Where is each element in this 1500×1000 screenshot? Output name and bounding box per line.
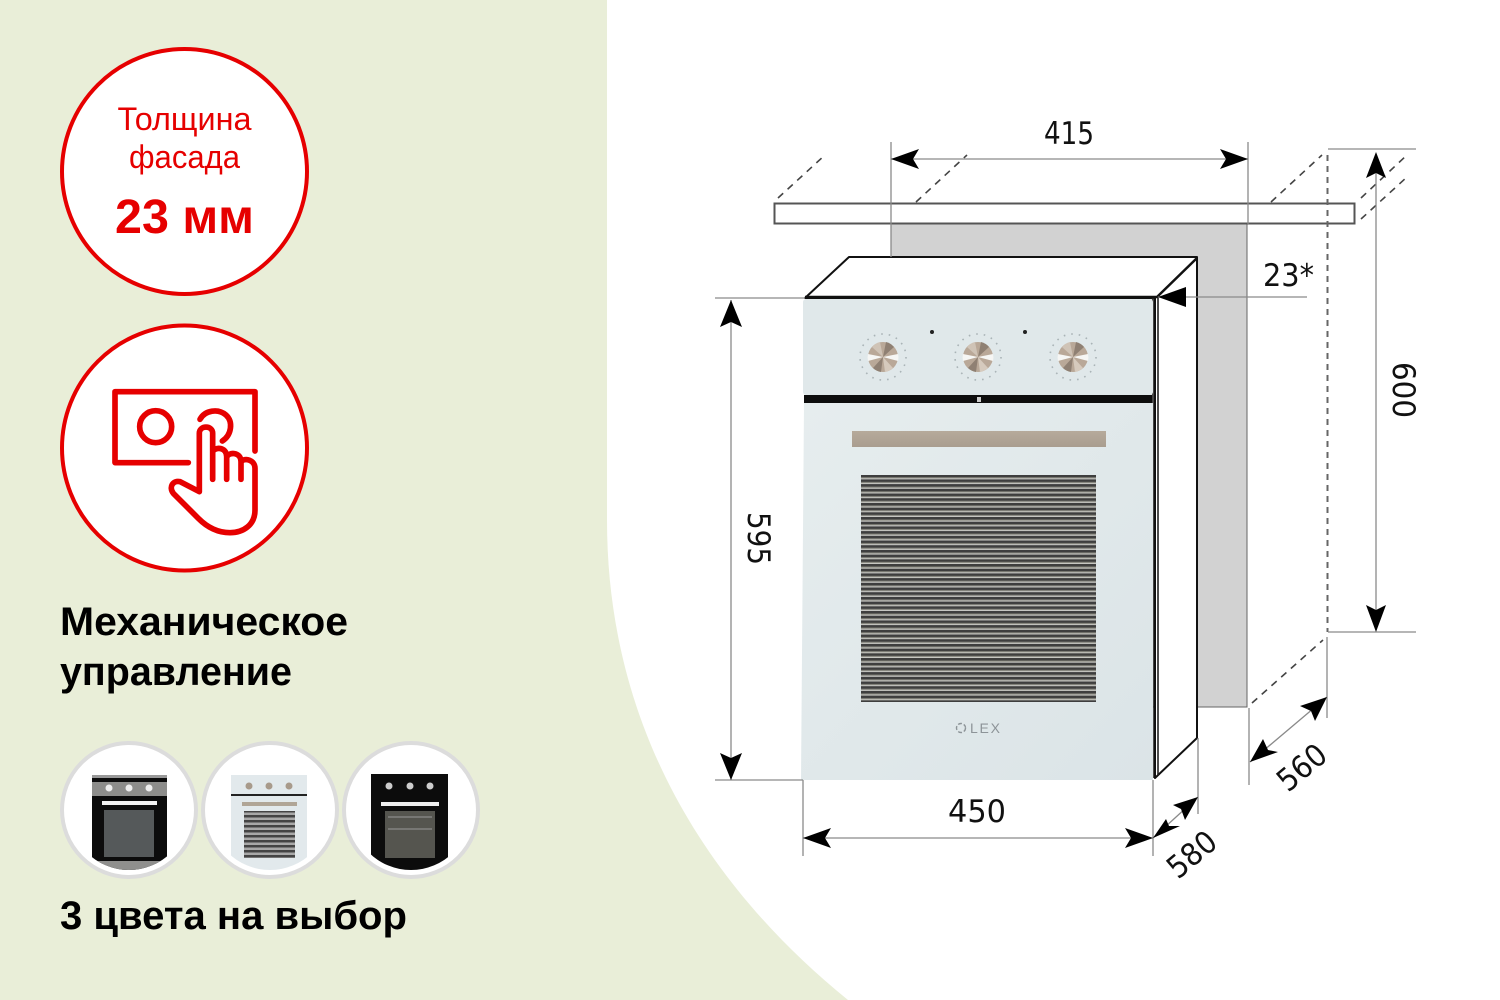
badge: facade thickness <box>62 49 307 294</box>
color option: steel oven <box>62 743 196 877</box>
color option: white oven <box>203 743 337 877</box>
color option: black oven <box>344 743 478 877</box>
badge: facade thickness: Толщина <box>118 101 252 137</box>
dimension labels: 23* <box>1263 258 1314 294</box>
dimension labels: 415 <box>1044 116 1094 152</box>
dimension labels: 450 <box>948 794 1006 830</box>
heading: three colors: 3 цвета на выбор <box>60 894 407 938</box>
niche: gray cutout behind oven <box>891 224 1247 707</box>
heading: mechanical control: Механическое <box>60 600 348 644</box>
oven photo: control panel, door, grille <box>801 299 1153 780</box>
dimension arrowheads <box>720 149 1386 848</box>
dashed guide lines <box>778 155 1407 703</box>
brand logo <box>956 720 1001 736</box>
dimension labels: 600 <box>1385 362 1421 418</box>
oven body outline <box>805 257 1197 778</box>
door handle <box>852 431 1106 447</box>
badge: facade thickness: фасада <box>129 139 240 175</box>
dimension lines <box>715 142 1416 856</box>
dimension labels <box>740 116 1421 886</box>
heading: mechanical control <box>60 600 348 694</box>
knobs <box>860 334 1096 380</box>
badge: mechanical control icon <box>62 326 307 570</box>
background: green panel with curved edge <box>0 0 848 1000</box>
brand logo: LEX <box>970 720 1001 736</box>
dimension labels: 560 <box>1270 737 1335 799</box>
heading: mechanical control: управление <box>60 650 292 694</box>
dimension labels: 595 <box>740 512 776 565</box>
dimension labels: 580 <box>1160 824 1225 886</box>
shelf board <box>774 204 1354 224</box>
badge: facade thickness: 23 мм <box>115 191 254 244</box>
indicator lamps <box>930 330 1027 334</box>
grille window <box>861 475 1096 702</box>
